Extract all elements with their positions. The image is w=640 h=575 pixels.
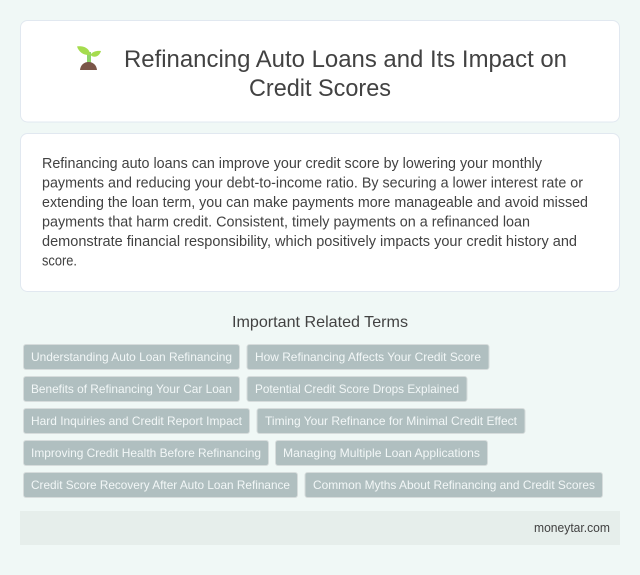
tag: improving (24, 440, 268, 466)
tag: timing: Timing Your Refinance for Minimal Credit Effect (265, 414, 518, 428)
footer: site name: moneytar.com (534, 521, 610, 535)
tag: how refinancing affects: How Refinancing Affects Your Credit Score (255, 350, 481, 364)
title: Refinancing Auto Loans and Its Impact on (124, 46, 567, 73)
tag: hard inquiries (24, 408, 250, 434)
tag: how refinancing affects (247, 344, 489, 370)
panel: header (20, 20, 620, 122)
summary text: demonstrate financial responsibility, which positively impacts your credit history and (42, 234, 577, 250)
related term tags (24, 344, 602, 498)
summary text: score. (42, 254, 77, 270)
summary text: payments that harm credit. Consistent, timely payments on a refinanced loan (42, 214, 530, 230)
icon: seedling (77, 46, 101, 70)
tag: potential drops: Potential Credit Score Drops Explained (255, 382, 459, 396)
summary text (42, 156, 588, 270)
tag: myths: Common Myths About Refinancing and Credit Scores (313, 478, 595, 492)
heading: related terms: Important Related Terms (232, 314, 408, 331)
summary text: Refinancing auto loans can improve your credit score by lowering your monthly (42, 156, 543, 172)
tag: benefits: Benefits of Refinancing Your Car Loan (31, 382, 232, 396)
tag: myths (305, 472, 602, 498)
tag: potential drops (247, 376, 467, 402)
tag: timing (257, 408, 525, 434)
title: Credit Scores (249, 75, 391, 102)
tag: hard inquiries: Hard Inquiries and Credit Report Impact (31, 414, 243, 428)
tag: understanding: Understanding Auto Loan Refinancing (31, 350, 232, 364)
tag: benefits (24, 376, 240, 402)
tag: improving: Improving Credit Health Before Refinancing (31, 446, 261, 460)
tag: recovery: Credit Score Recovery After Auto Loan Refinance (31, 478, 290, 492)
summary text: extending the loan term, you can make payments more manageable and avoid missed (42, 195, 588, 211)
tag: understanding (24, 344, 240, 370)
summary text: payments and reducing your debt-to-income ratio. By securing a lower interest rate or (42, 176, 583, 192)
title (124, 46, 567, 102)
tag: managing (276, 440, 488, 466)
panel: summary (20, 134, 620, 292)
tag: managing: Managing Multiple Loan Applications (283, 446, 480, 460)
footer (20, 511, 620, 545)
tag: recovery (24, 472, 298, 498)
